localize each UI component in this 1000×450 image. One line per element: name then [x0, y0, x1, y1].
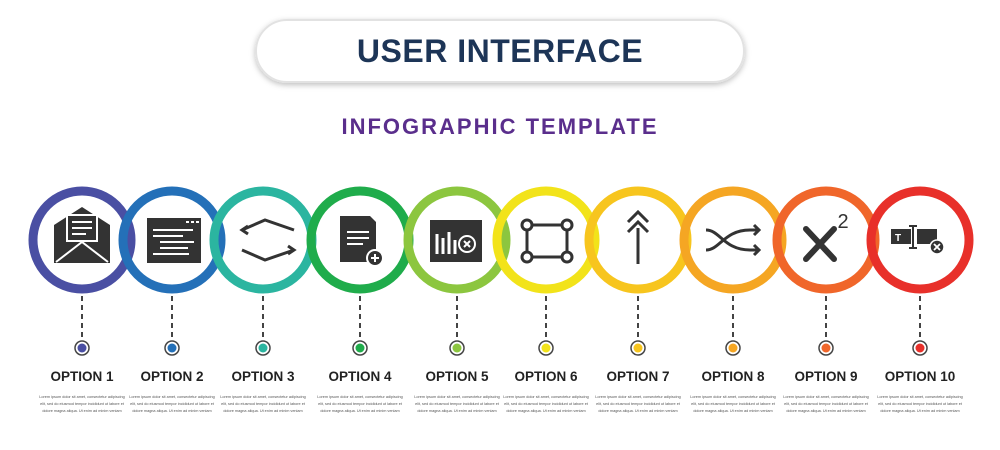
option 4	[311, 191, 409, 413]
option 5: dolore magna aliqua. Ut enim ad minim veniam	[417, 409, 497, 413]
option 9: elit, sed do eiusmod tempor incididunt ut labore et	[784, 402, 869, 406]
icon: x squared	[806, 211, 849, 259]
title	[256, 20, 744, 82]
option 7	[589, 191, 687, 413]
option 9: dolore magna aliqua. Ut enim ad minim veniam	[786, 409, 866, 413]
option 6: Lorem ipsum dolor sit amet, consectetur adipiscing	[503, 395, 589, 399]
option 4: OPTION 4	[328, 369, 392, 384]
option 10: elit, sed do eiusmod tempor incididunt ut labore et	[878, 402, 963, 406]
option 7: dolore magna aliqua. Ut enim ad minim veniam	[598, 409, 678, 413]
option 2: elit, sed do eiusmod tempor incididunt ut labore et	[130, 402, 215, 406]
option 5: elit, sed do eiusmod tempor incididunt ut labore et	[415, 402, 500, 406]
option 8: dolore magna aliqua. Ut enim ad minim veniam	[693, 409, 773, 413]
icon: chart window with x	[430, 220, 482, 262]
icon: up arrow	[628, 212, 648, 264]
option 7: Lorem ipsum dolor sit amet, consectetur adipiscing	[595, 395, 681, 399]
option 6: OPTION 6	[514, 369, 578, 384]
option 2: OPTION 2	[140, 369, 204, 384]
option 8	[684, 191, 782, 413]
option 4: elit, sed do eiusmod tempor incididunt ut labore et	[318, 402, 403, 406]
option 2	[123, 191, 221, 413]
option 7: OPTION 7	[606, 369, 670, 384]
option 10: Lorem ipsum dolor sit amet, consectetur adipiscing	[877, 395, 963, 399]
icon: swap arrows	[242, 220, 294, 260]
icon: add file	[340, 216, 383, 266]
option 7: elit, sed do eiusmod tempor incididunt ut labore et	[596, 402, 681, 406]
icon: open mail	[54, 207, 110, 263]
option 3: dolore magna aliqua. Ut enim ad minim veniam	[223, 409, 303, 413]
option 1: dolore magna aliqua. Ut enim ad minim veniam	[42, 409, 122, 413]
option 9: OPTION 9	[794, 369, 858, 384]
option 5: Lorem ipsum dolor sit amet, consectetur adipiscing	[414, 395, 500, 399]
option 6: elit, sed do eiusmod tempor incididunt ut labore et	[504, 402, 589, 406]
option 10: dolore magna aliqua. Ut enim ad minim veniam	[880, 409, 960, 413]
option 2: dolore magna aliqua. Ut enim ad minim veniam	[132, 409, 212, 413]
icon: x squared: 2	[837, 211, 849, 233]
option 4: Lorem ipsum dolor sit amet, consectetur adipiscing	[317, 395, 403, 399]
option 3: elit, sed do eiusmod tempor incididunt ut labore et	[221, 402, 306, 406]
option 9: Lorem ipsum dolor sit amet, consectetur adipiscing	[783, 395, 869, 399]
icon: text field remove: T	[895, 233, 901, 244]
icon: shuffle	[706, 225, 759, 255]
option 8: Lorem ipsum dolor sit amet, consectetur adipiscing	[690, 395, 776, 399]
icon: bounding box	[522, 220, 572, 262]
icon: text field remove	[891, 226, 944, 254]
option 5	[408, 191, 506, 413]
subtitle: INFOGRAPHIC TEMPLATE	[341, 114, 659, 139]
option 3: OPTION 3	[231, 369, 295, 384]
option 5: OPTION 5	[425, 369, 489, 384]
option 8: elit, sed do eiusmod tempor incididunt ut labore et	[691, 402, 776, 406]
option 3: Lorem ipsum dolor sit amet, consectetur adipiscing	[220, 395, 306, 399]
option 6	[497, 191, 595, 413]
option 10	[871, 191, 969, 413]
icon: code window	[147, 218, 201, 263]
option 2: Lorem ipsum dolor sit amet, consectetur adipiscing	[129, 395, 215, 399]
option 8: OPTION 8	[701, 369, 765, 384]
option 3	[214, 191, 312, 413]
option 10: OPTION 10	[885, 369, 955, 384]
option 4: dolore magna aliqua. Ut enim ad minim veniam	[320, 409, 400, 413]
option 1: OPTION 1	[50, 369, 114, 384]
option 9	[777, 191, 875, 413]
option 6: dolore magna aliqua. Ut enim ad minim veniam	[506, 409, 586, 413]
title: USER INTERFACE	[357, 33, 643, 69]
option 1: Lorem ipsum dolor sit amet, consectetur adipiscing	[39, 395, 125, 399]
option 1: elit, sed do eiusmod tempor incididunt ut labore et	[40, 402, 125, 406]
option 1	[33, 191, 131, 413]
